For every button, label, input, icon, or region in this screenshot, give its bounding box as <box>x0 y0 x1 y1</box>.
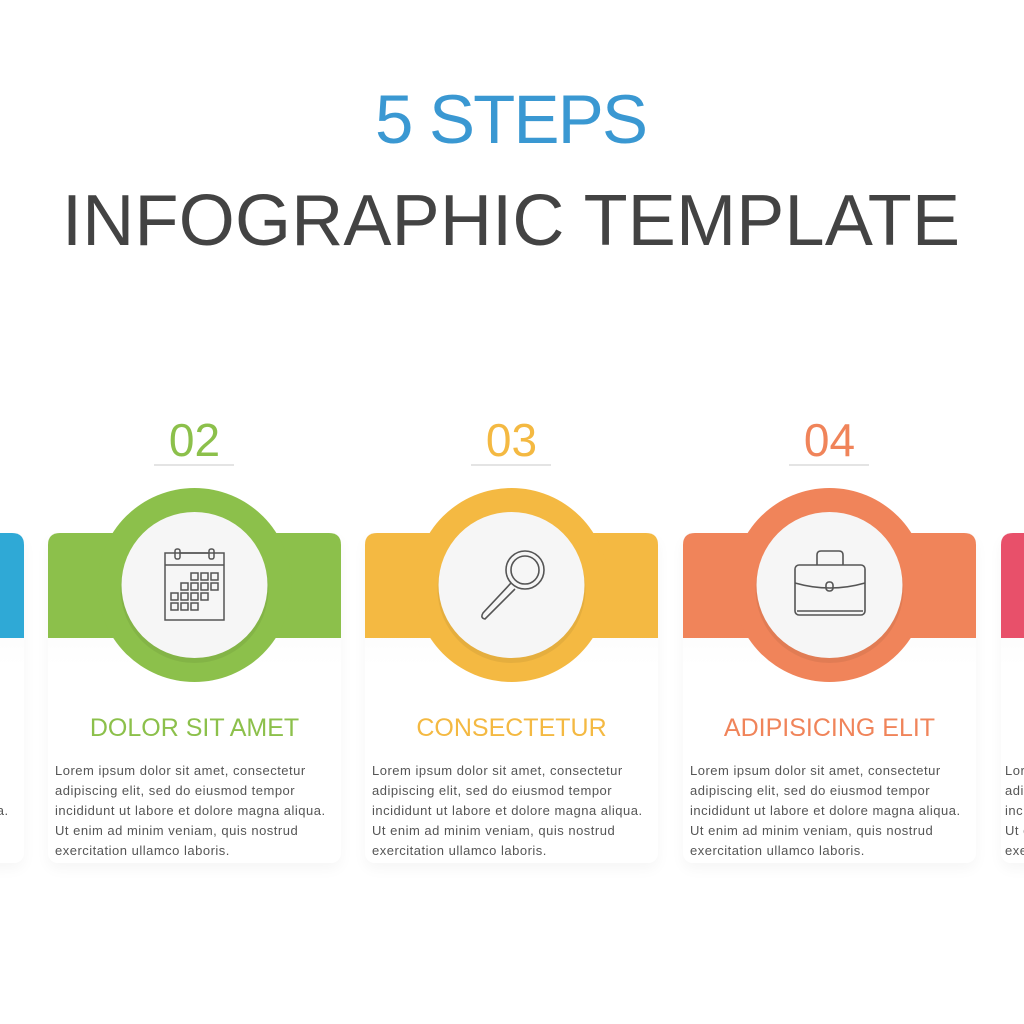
shape 4 with briefcase icon <box>683 488 976 682</box>
text 2 <box>55 763 326 858</box>
text 2: incididunt ut labore et dolore magna aliqua. <box>55 803 326 818</box>
number 02: 02 <box>169 414 220 466</box>
shape 3 with magnifier icon <box>365 488 658 682</box>
title <box>62 81 960 260</box>
step 3 card <box>365 414 658 858</box>
step 4 card <box>683 414 976 858</box>
step 1 card (partial) <box>0 533 24 818</box>
heading 2: DOLOR SIT AMET <box>90 714 299 742</box>
text 3: incididunt ut labore et dolore magna aliqua. <box>372 803 643 818</box>
title: 5 STEPS <box>375 81 648 158</box>
text 2: adipiscing elit, sed do eiusmod tempor <box>55 783 295 798</box>
text 3: exercitation ullamco laboris. <box>372 843 547 858</box>
text 4: Ut enim ad minim veniam, quis nostrud <box>690 823 933 838</box>
text 4: Lorem ipsum dolor sit amet, consectetur <box>690 763 941 778</box>
text 2: exercitation ullamco laboris. <box>55 843 230 858</box>
text 4: incididunt ut labore et dolore magna aliqua. <box>690 803 961 818</box>
shape 5 <box>1001 533 1024 638</box>
number 03: 03 <box>486 414 537 466</box>
step 2 card <box>48 414 341 858</box>
shape 2 with calendar icon <box>48 488 341 682</box>
text 4: exercitation ullamco laboris. <box>690 843 865 858</box>
text 3: Lorem ipsum dolor sit amet, consectetur <box>372 763 623 778</box>
text 4 <box>690 763 961 858</box>
title: INFOGRAPHIC TEMPLATE <box>62 181 960 260</box>
text 5 <box>1005 763 1024 858</box>
text 4: adipiscing elit, sed do eiusmod tempor <box>690 783 930 798</box>
heading 4: ADIPISICING ELIT <box>724 714 935 742</box>
heading 3: CONSECTETUR <box>416 714 607 742</box>
shape 1 <box>0 533 24 638</box>
text 3: Ut enim ad minim veniam, quis nostrud <box>372 823 615 838</box>
number 04: 04 <box>804 414 855 466</box>
text 3 <box>372 763 643 858</box>
step 5 card (partial) <box>1001 533 1024 858</box>
text 2: Ut enim ad minim veniam, quis nostrud <box>55 823 298 838</box>
text 3: adipiscing elit, sed do eiusmod tempor <box>372 783 612 798</box>
text 2: Lorem ipsum dolor sit amet, consectetur <box>55 763 306 778</box>
